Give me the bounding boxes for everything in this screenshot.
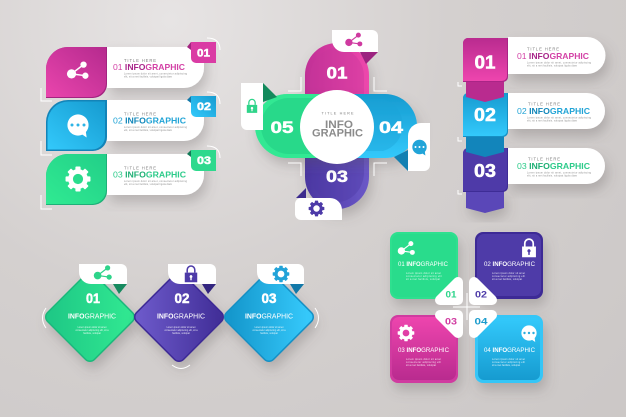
arm 01 pink: 01 — [326, 64, 348, 82]
tab: chat icon — [408, 123, 430, 171]
card 02 purple: Lorem ipsum dolor sit amet — [492, 272, 525, 275]
card 02 purple — [475, 232, 543, 299]
panel: numbered vertical list — [458, 37, 606, 213]
diamond 03 blue: INFOGRAPHIC — [245, 314, 293, 320]
chat dots — [523, 332, 535, 334]
centre circle: GRAPHIC — [312, 128, 363, 140]
petal 01 — [440, 282, 458, 300]
panel: stacked leaf list — [41, 38, 220, 209]
card 03 pink: consectetur adipiscing elit — [406, 361, 441, 364]
tab: lock icon — [241, 83, 263, 130]
diamond 01 green: facilisis, volutpat — [83, 332, 101, 335]
card 03 pink: 03 INFOGRAPHIC — [398, 347, 449, 354]
card 04 blue: consectetur adipiscing elit — [492, 361, 525, 364]
card 04 blue — [475, 315, 543, 383]
card 01 green — [390, 232, 458, 299]
petal 03: 03 — [445, 316, 457, 328]
centre circle — [300, 90, 374, 164]
petal 02 — [474, 282, 492, 300]
row 1: pink leaf with share icon — [41, 38, 220, 101]
row 2: blue leaf with chat icon: 02 INFOGRAPHIC — [113, 116, 186, 126]
arm 04 blue — [337, 94, 417, 171]
arm 03 purple: 03 — [326, 167, 348, 186]
diamond 01 green: 01 — [86, 290, 100, 306]
diamond 01 green — [52, 264, 128, 355]
card 01 green: 01 INFOGRAPHIC — [398, 261, 448, 268]
panel: diamond row — [42, 264, 318, 368]
diamond 02 purple: facilisis, volutpat — [172, 332, 190, 335]
row 3: white bar: Lorem ipsum dolor sit amet, consectetur adipiscing — [527, 172, 592, 174]
diamond 03 blue — [231, 264, 307, 355]
centre circle: INFO — [325, 119, 353, 131]
tab: gear icon — [295, 198, 342, 220]
corner brackets — [288, 77, 387, 176]
row 1: white bar: TITLE HERE — [527, 46, 559, 52]
row 1: white bar: 01 INFOGRAPHIC — [517, 51, 589, 61]
diamond 03 blue: facilisis, volutpat — [260, 332, 278, 335]
diamond 03 blue: consectetur adipiscing elit, sit a — [252, 329, 286, 332]
pink block 01: 01 — [474, 52, 496, 72]
card 04 blue: sit a met facilisis, volutpat — [492, 364, 520, 367]
row 2: blue leaf with chat icon: TITLE HERE — [124, 112, 156, 116]
card 01 green: Lorem ipsum dolor sit amet — [406, 272, 441, 275]
diamond 02 purple: INFOGRAPHIC — [157, 314, 205, 320]
row 2: white bar: Lorem ipsum dolor sit amet, consectetur adipiscing — [527, 116, 592, 120]
arm 04 blue: 04 — [379, 118, 404, 137]
card 02 purple: 02 INFOGRAPHIC — [484, 261, 535, 268]
chat dots — [414, 146, 424, 148]
arm 03 purple — [296, 127, 369, 209]
centre cross — [453, 293, 480, 320]
diamond 02 purple — [141, 264, 217, 355]
row 1: white bar: elit, sit a met facilisis, volutpat ligula diam — [527, 64, 577, 68]
card 03 pink: sit a met facilisis, volutpat — [406, 364, 436, 367]
petal 02: 02 — [475, 290, 487, 300]
diamond 03 blue: 03 — [262, 290, 277, 306]
card 01 green: sit a met facilisis, volutpat — [406, 278, 440, 281]
diamond 01 green: Lorem ipsum dolor sit amet — [78, 326, 107, 329]
petal 03 — [440, 315, 458, 333]
petal 04 — [474, 315, 492, 333]
petal 04: 04 — [474, 316, 488, 328]
diamond 03 blue: Lorem ipsum dolor sit amet — [255, 326, 284, 329]
blue block 02 — [458, 93, 508, 157]
blue block 02: 02 — [474, 105, 496, 125]
row 1: pink leaf with share icon: 01 — [197, 48, 210, 60]
arc brackets — [42, 308, 318, 368]
row 3: white bar: 03 INFOGRAPHIC — [517, 161, 590, 171]
row 2: blue leaf with chat icon: elit, sit a met facilisis, volutpat ligula diam — [124, 129, 172, 132]
row 3: green leaf with gear icon: Lorem ipsum dolor sit amet, consectetur adipiscing — [124, 180, 188, 183]
diamond 02 purple: consectetur adipiscing elit, sit a — [164, 329, 198, 332]
row 2: blue leaf with chat icon: Lorem ipsum dolor sit amet, consectetur adipiscing — [124, 126, 188, 129]
arm 01 pink — [305, 43, 369, 127]
diamond 01 green: consectetur adipiscing elit, sit a — [75, 329, 109, 332]
petal 01: 01 — [446, 290, 457, 300]
card 02 purple: consectetur adipiscing elit — [492, 275, 525, 278]
row 2: blue leaf with chat icon — [41, 92, 220, 155]
card 04 blue: 04 INFOGRAPHIC — [484, 347, 535, 354]
row 3: white bar — [508, 148, 605, 184]
purple block 03: 03 — [474, 161, 496, 181]
centre circle: TITLE HERE — [322, 112, 354, 116]
chat dots — [70, 124, 86, 126]
arm 05 green: 05 — [270, 118, 294, 137]
row 1: pink leaf with share icon: elit, sit a met facilisis, volutpat ligula diam — [124, 76, 172, 78]
row 1: pink leaf with share icon: TITLE HERE — [124, 58, 156, 63]
arm 05 green — [255, 83, 337, 158]
card 03 pink: Lorem ipsum dolor sit amet — [406, 358, 441, 361]
row 2: white bar: elit, sit a met facilisis, volutpat ligula diam — [527, 120, 577, 122]
diamond 02 purple: Lorem ipsum dolor sit amet — [167, 326, 196, 329]
panel: radial cross diagram — [241, 30, 430, 220]
row 2: blue leaf with chat icon: 02 — [197, 101, 211, 113]
row 3: green leaf with gear icon: TITLE HERE — [124, 166, 156, 170]
diamond 02 purple: 02 — [174, 290, 190, 306]
purple block 03 — [458, 148, 508, 213]
row 2: white bar — [508, 93, 605, 129]
row 1: white bar — [508, 37, 606, 74]
card 02 purple: sit a met facilisis, volutpat — [492, 278, 522, 281]
row 2: white bar: TITLE HERE — [528, 102, 560, 106]
diamond 01 green: INFOGRAPHIC — [68, 314, 116, 320]
row 1: pink leaf with share icon: Lorem ipsum dolor sit amet, consectetur adipiscing — [124, 72, 188, 76]
row 1: pink leaf with share icon: 01 INFOGRAPHIC — [113, 62, 185, 72]
row 1: white bar: Lorem ipsum dolor sit amet, consectetur adipiscing — [527, 62, 592, 64]
row 3: green leaf with gear icon — [41, 146, 220, 209]
row 2: white bar: 02 INFOGRAPHIC — [517, 106, 590, 116]
row 3: green leaf with gear icon: elit, sit a met facilisis, volutpat ligula diam — [124, 183, 172, 186]
row 3: white bar: TITLE HERE — [528, 156, 560, 162]
card 01 green: consectetur adipiscing elit — [406, 275, 442, 278]
panel: four quadrant cards — [390, 232, 543, 383]
row 3: green leaf with gear icon: 03 INFOGRAPHIC — [113, 170, 186, 180]
pink block 01 — [458, 38, 508, 102]
tab: share icon — [332, 30, 378, 64]
card 03 pink — [390, 315, 458, 383]
row 3: white bar: elit, sit a met facilisis, volutpat ligula diam — [527, 174, 577, 178]
row 3: green leaf with gear icon: 03 — [197, 155, 211, 167]
card 04 blue: Lorem ipsum dolor sit amet — [492, 358, 525, 361]
